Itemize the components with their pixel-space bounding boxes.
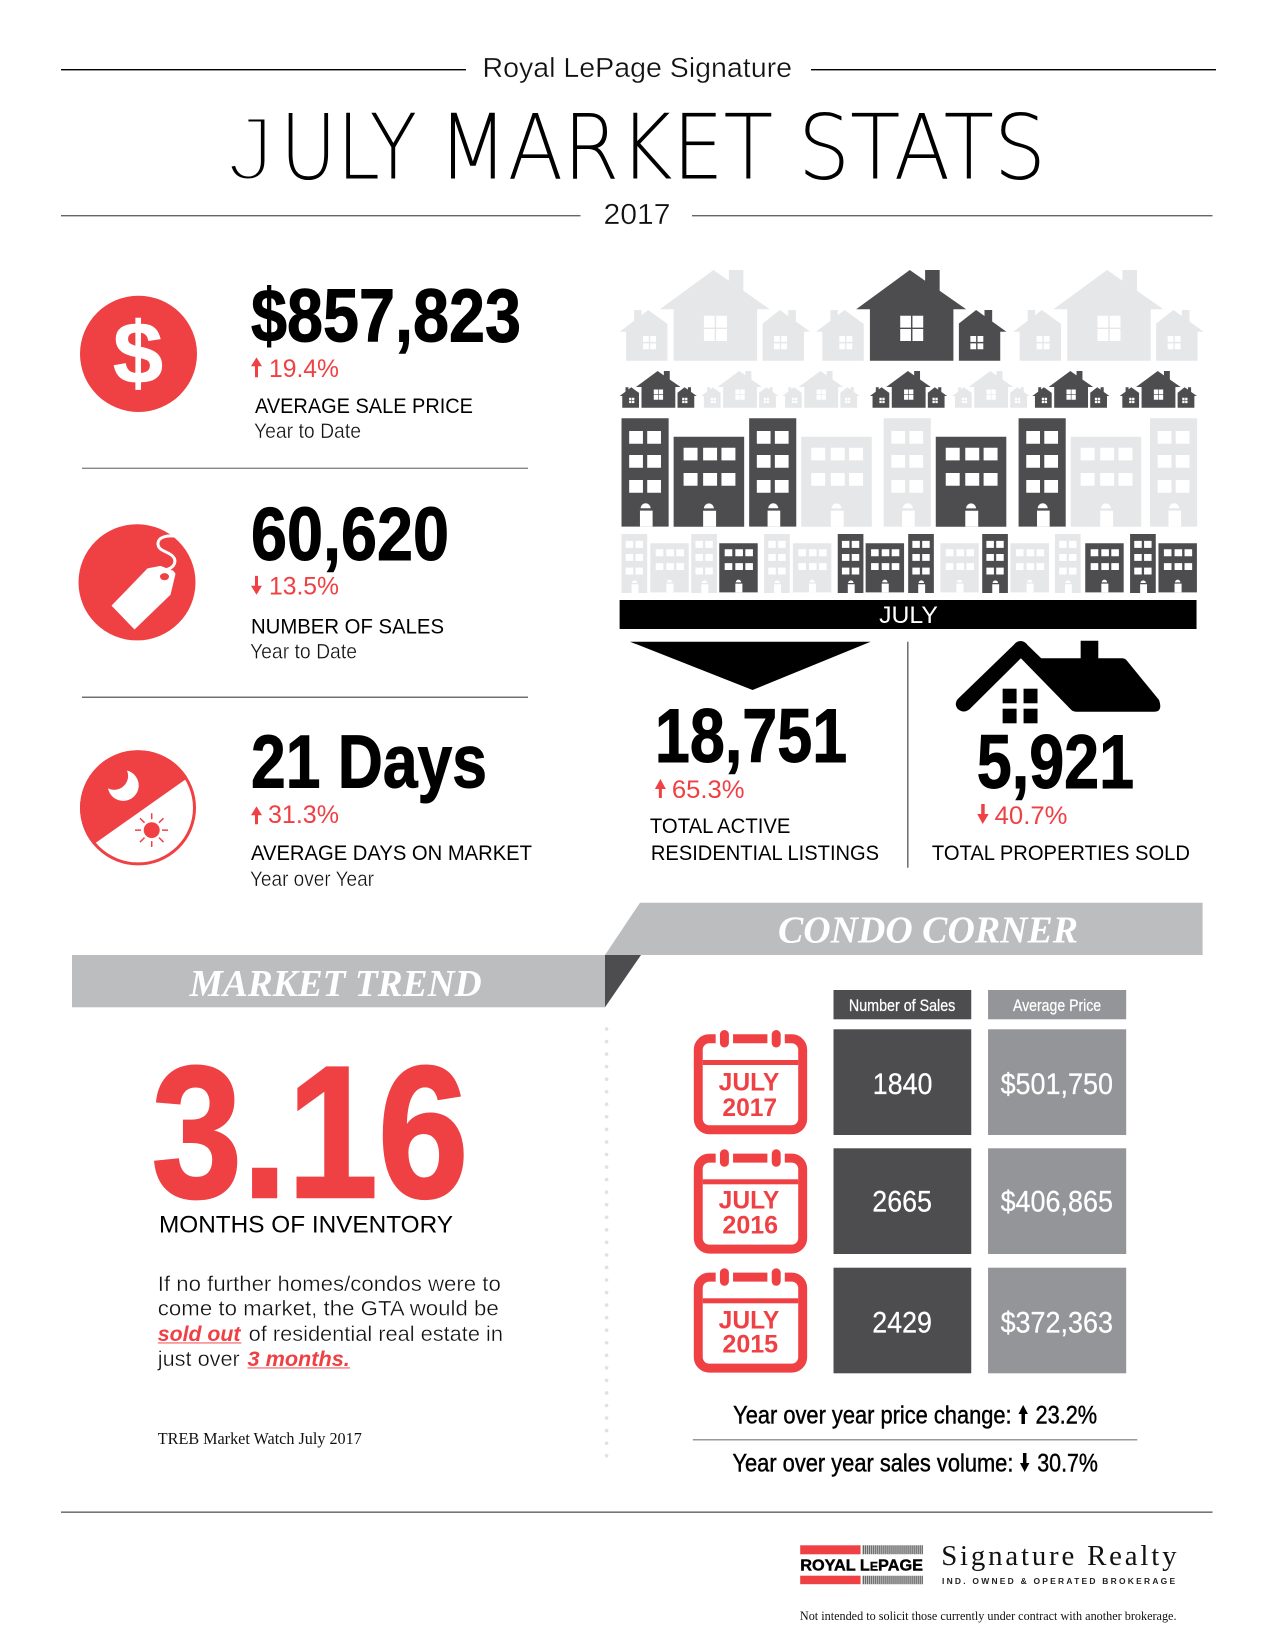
logo: Royal LePage	[800, 1545, 923, 1584]
row: July 2016	[698, 1147, 1126, 1254]
summary: price change: 23.2%	[1035, 1401, 1097, 1429]
cell: price 2016	[988, 1148, 1126, 1254]
stat: sales change: 13.5%	[269, 573, 339, 601]
banner: condo corner: CONDO CORNER	[778, 910, 1078, 952]
text block: explanation	[157, 1273, 503, 1371]
icon: up arrow	[251, 806, 262, 824]
title: STATS	[798, 96, 1046, 200]
icon: up arrow	[655, 779, 666, 798]
icon: calendar 2015	[698, 1266, 803, 1368]
stat: sales value: 60,620	[251, 492, 449, 577]
disclaimer: Not intended to solicit those currently under contract with another brokerage.	[800, 1608, 1177, 1623]
column: condo data and footer	[693, 990, 1177, 1623]
stat: days value: 21 Days	[251, 720, 487, 804]
icon: up arrow	[251, 357, 262, 377]
summary: price change: Year over year price change:	[733, 1401, 1012, 1429]
banner: July: JULY	[879, 602, 938, 629]
column: July housing overview	[620, 270, 1204, 868]
title: ULY	[280, 96, 417, 200]
text block: explanation: 3 months.	[248, 1348, 350, 1371]
logo: Royal LePage: ROYAL LEPAGE	[800, 1558, 923, 1575]
label: total active residential listings: TOTAL ACTIVE	[650, 814, 790, 838]
cell: price 2017	[988, 1029, 1126, 1135]
label: months of inventory: MONTHS OF INVENTORY	[159, 1212, 453, 1239]
text block: explanation: just over	[157, 1348, 240, 1371]
banner: market trend: MARKET TREND	[189, 963, 482, 1005]
year: 2017	[604, 199, 670, 231]
title	[227, 96, 1046, 200]
panel: properties sold	[932, 641, 1190, 865]
icon: funnel triangle	[630, 642, 871, 690]
icon: house	[956, 641, 1160, 723]
header rule: bottom	[61, 215, 1212, 216]
stat: price value: $857,823	[251, 274, 521, 358]
cell: sales 2015	[834, 1268, 971, 1373]
icon: calendar 2016: 2016	[722, 1211, 778, 1239]
label: total active residential listings: RESIDENTIAL LISTINGS	[651, 841, 879, 865]
cell: price 2016: $406,865	[1001, 1186, 1113, 1219]
icon: calendar 2017: 2017	[722, 1094, 777, 1122]
icon: calendar 2017	[698, 1028, 803, 1130]
logo: Signature Realty: IND. OWNED & OPERATED BROKERAGE	[942, 1576, 1175, 1586]
column header: average price	[988, 990, 1126, 1019]
panel: months of inventory	[152, 1027, 503, 1448]
title: MARKET	[438, 96, 773, 200]
column header: number of sales	[834, 990, 971, 1019]
icon: calendar 2016	[698, 1147, 803, 1249]
stat: 3.16: 3.16	[152, 1027, 468, 1237]
header rule: top	[61, 69, 1216, 70]
label: total properties sold: TOTAL PROPERTIES SOLD	[932, 841, 1190, 865]
cell: price 2015	[988, 1268, 1126, 1373]
cell: sales 2017: 1840	[873, 1068, 932, 1101]
label: total active residential listings	[650, 814, 879, 865]
icon: price tag	[78, 524, 196, 640]
label: period: Year to Date	[254, 420, 361, 443]
source note: TREB Market Watch July 2017	[158, 1429, 362, 1448]
stat: listings value: 18,751	[655, 694, 847, 779]
icon: calendar 2017: JULY	[719, 1069, 780, 1097]
cell: sales 2017	[834, 1029, 971, 1135]
icon: down arrow	[977, 804, 989, 824]
illustration: apartment rows	[622, 418, 1197, 593]
illustration: house rows	[620, 270, 1204, 408]
stat: sold value: 5,921	[977, 720, 1134, 805]
stat: days change: 31.3%	[268, 801, 339, 829]
panel: average sale price	[80, 274, 521, 443]
stat: listings change: 65.3%	[672, 776, 745, 804]
panel: active listings	[630, 642, 879, 865]
icon: dollar coin: $	[113, 304, 163, 402]
icon: dollar coin	[80, 296, 197, 412]
text block: explanation: of residential real estate in	[249, 1323, 503, 1346]
label: period: Year to Date	[250, 640, 357, 663]
cell: sales 2015: 2429	[872, 1307, 932, 1340]
label: average days on market: AVERAGE DAYS ON MARKET	[251, 841, 532, 865]
subtitle: Royal LePage Signature: Royal LePage Signature	[482, 52, 792, 83]
cell: price 2017: $501,750	[1001, 1068, 1113, 1101]
summary: sales volume: 30.7%	[1037, 1449, 1098, 1477]
cell: price 2015: $372,363	[1001, 1307, 1113, 1340]
icon: calendar 2015: JULY	[719, 1306, 780, 1334]
icon: calendar 2016: JULY	[719, 1186, 780, 1214]
cell: sales 2016	[834, 1148, 971, 1254]
text block: explanation: come to market, the GTA would be	[158, 1298, 499, 1321]
panel: days on market	[80, 734, 532, 886]
banner: condo corner	[605, 903, 1203, 955]
summary: sales volume: Year over year sales volume:	[732, 1449, 1013, 1477]
stat: sold change: 40.7%	[995, 802, 1067, 830]
icon: down arrow	[251, 576, 262, 595]
text block: explanation: If no further homes/condos were to	[158, 1273, 501, 1296]
panel: condo table	[698, 990, 1126, 1373]
column header: number of sales: Number of Sales	[849, 996, 955, 1015]
icon: calendar 2015: 2015	[722, 1331, 778, 1359]
text block: explanation: sold out	[158, 1323, 242, 1346]
column: key stats	[78, 274, 532, 891]
label: average sale price: AVERAGE SALE PRICE	[255, 394, 473, 418]
stat: price change: 19.4%	[269, 355, 339, 383]
panel: number of sales	[78, 492, 449, 663]
label: period: Year over Year	[250, 868, 374, 891]
row: July 2015	[698, 1266, 1126, 1373]
logo: Signature Realty: Signature Realty	[941, 1540, 1177, 1572]
column header: average price: Average Price	[1013, 996, 1101, 1015]
banner: market trend	[72, 955, 641, 1007]
label: number of sales: NUMBER OF SALES	[251, 615, 444, 638]
cell: sales 2016: 2665	[872, 1186, 932, 1219]
title: J	[227, 98, 274, 200]
row: July 2017	[698, 1028, 1126, 1135]
banner: July	[620, 600, 1197, 629]
icon: day and night	[80, 750, 196, 865]
logo: Signature Realty	[941, 1540, 1177, 1586]
